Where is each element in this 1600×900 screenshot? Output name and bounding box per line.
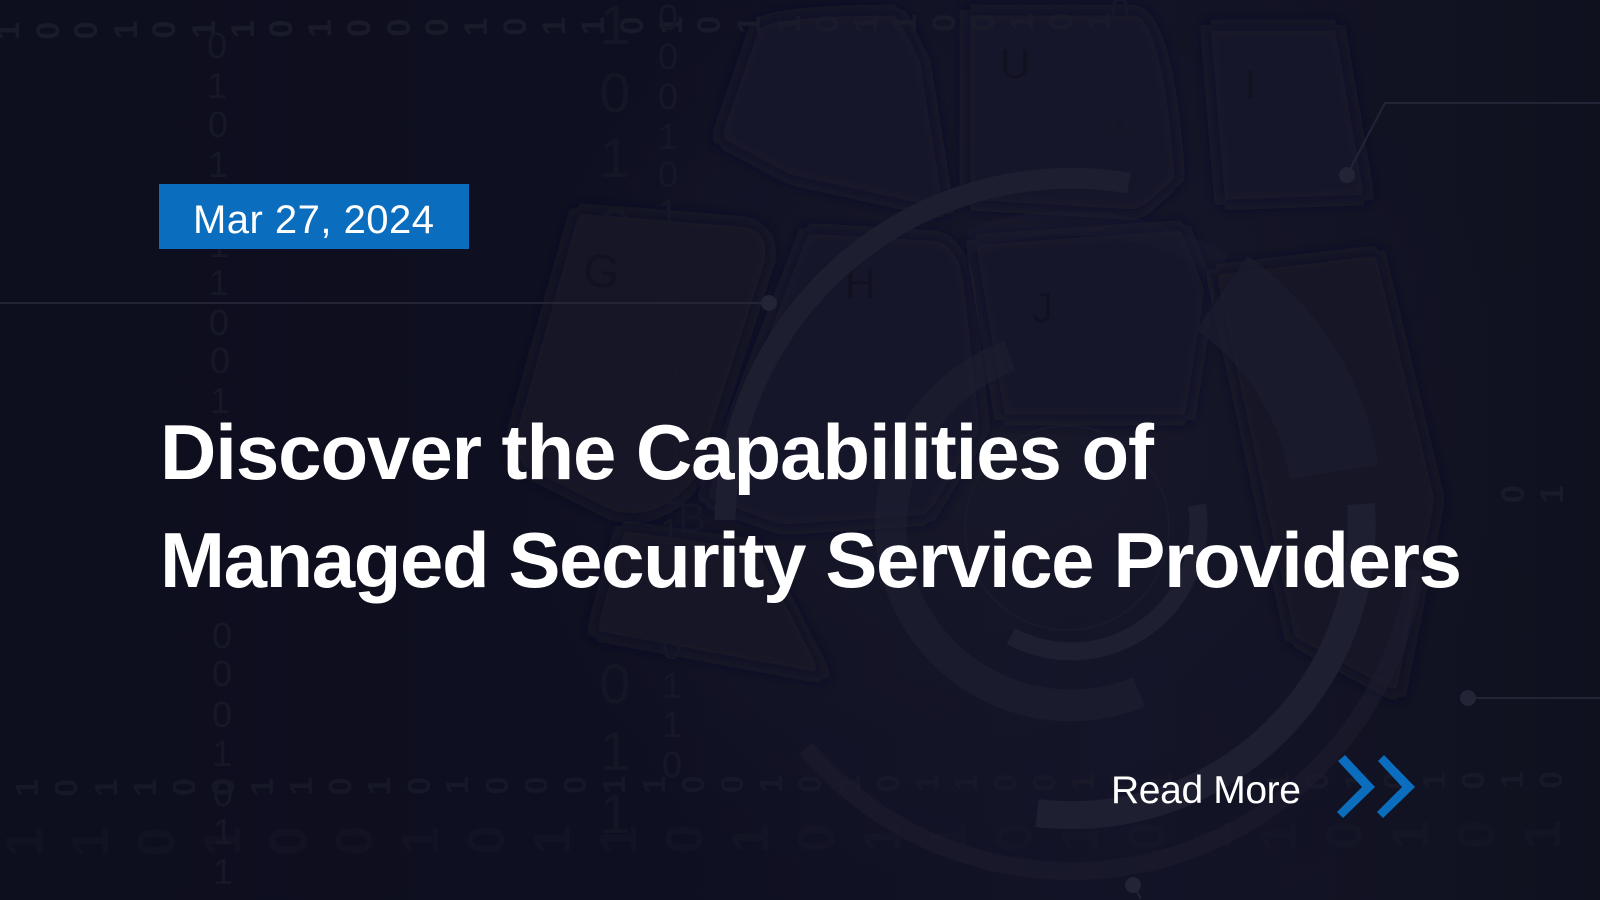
circuit: bottom line xyxy=(1125,877,1141,899)
ring: outer lower arc xyxy=(806,570,1415,871)
binary digit rows: 1011001101010001100101011001010110101010 xyxy=(9,771,1569,797)
key letters: I xyxy=(1245,63,1256,107)
date badge: Mar 27, 2024 xyxy=(193,198,434,242)
key letters: U xyxy=(1000,40,1030,87)
binary digit rows: 110100101101011010110101 xyxy=(0,820,1572,857)
vertical binary columns: 01010110010001011 xyxy=(207,25,233,892)
ring: thin centre circle xyxy=(965,426,1169,630)
circuit: left line xyxy=(0,295,777,311)
date badge xyxy=(159,184,469,249)
ring: small arc xyxy=(1011,505,1198,651)
key letters: B xyxy=(678,494,706,541)
concentric security rings xyxy=(725,178,1415,871)
key letters: H xyxy=(845,260,875,307)
ring: upper band xyxy=(970,223,1222,265)
ring: middle arc xyxy=(1037,504,1362,815)
circuit: top-right line xyxy=(1339,103,1600,183)
ring: outer upper arc xyxy=(725,178,1129,520)
background keyboard keys xyxy=(511,10,1440,700)
key letters xyxy=(581,40,1256,541)
binary digit rows: 10010110100010110101101100101 xyxy=(0,12,1117,40)
circuit: bottom-right line xyxy=(1460,690,1600,706)
ring: thick right segment xyxy=(1222,293,1334,472)
vertical binary columns: 1010011 xyxy=(599,0,631,845)
ring: inner left arc xyxy=(891,356,1139,705)
key letters: J xyxy=(1032,284,1053,331)
title xyxy=(160,408,1462,604)
title: Managed Security Service Providers xyxy=(160,516,1462,604)
icon: double chevron arrow xyxy=(1337,755,1415,818)
vertical binary columns: 0001011010101100110 xyxy=(658,0,682,785)
binary digit rows: 01 xyxy=(1495,485,1570,503)
title: Discover the Capabilities of xyxy=(160,408,1155,496)
read more label: Read More xyxy=(1111,769,1301,812)
key letters: G xyxy=(581,243,622,299)
vertical binary columns xyxy=(207,0,1129,892)
